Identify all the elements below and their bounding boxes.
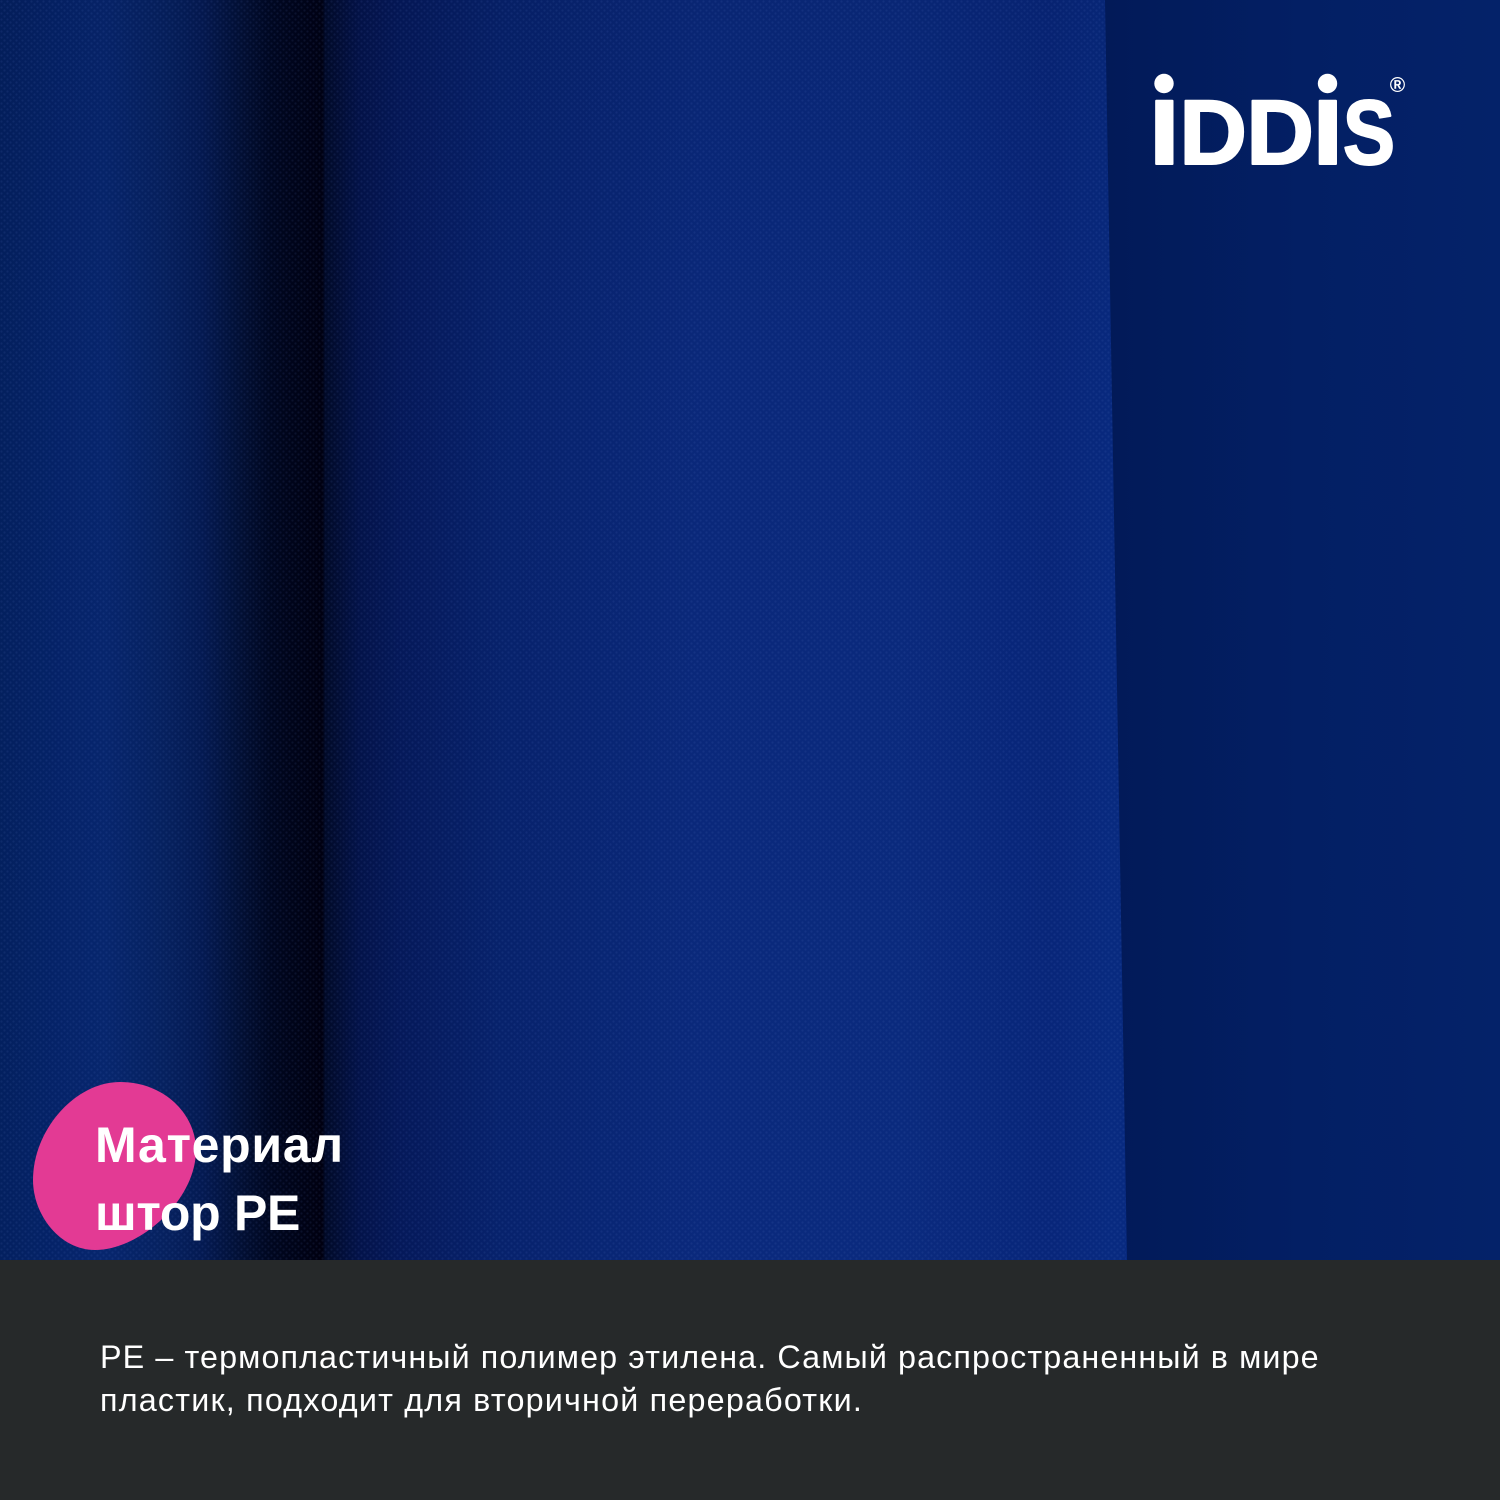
description text: PE – термопластичный полимер этилена. Самый распространенный в мире [100,1339,1320,1375]
heading: Материал [95,1117,344,1173]
description text [100,1339,1320,1418]
logo: IDDIS [1149,74,1406,180]
description text: пластик, подходит для вторичной переработки. [100,1382,863,1418]
logo: IDDIS: ® [1390,74,1406,97]
heading: штор PE [95,1185,300,1241]
bottom dark band [0,1260,1500,1500]
heading [95,1117,344,1241]
pink blob accent [33,1082,196,1250]
